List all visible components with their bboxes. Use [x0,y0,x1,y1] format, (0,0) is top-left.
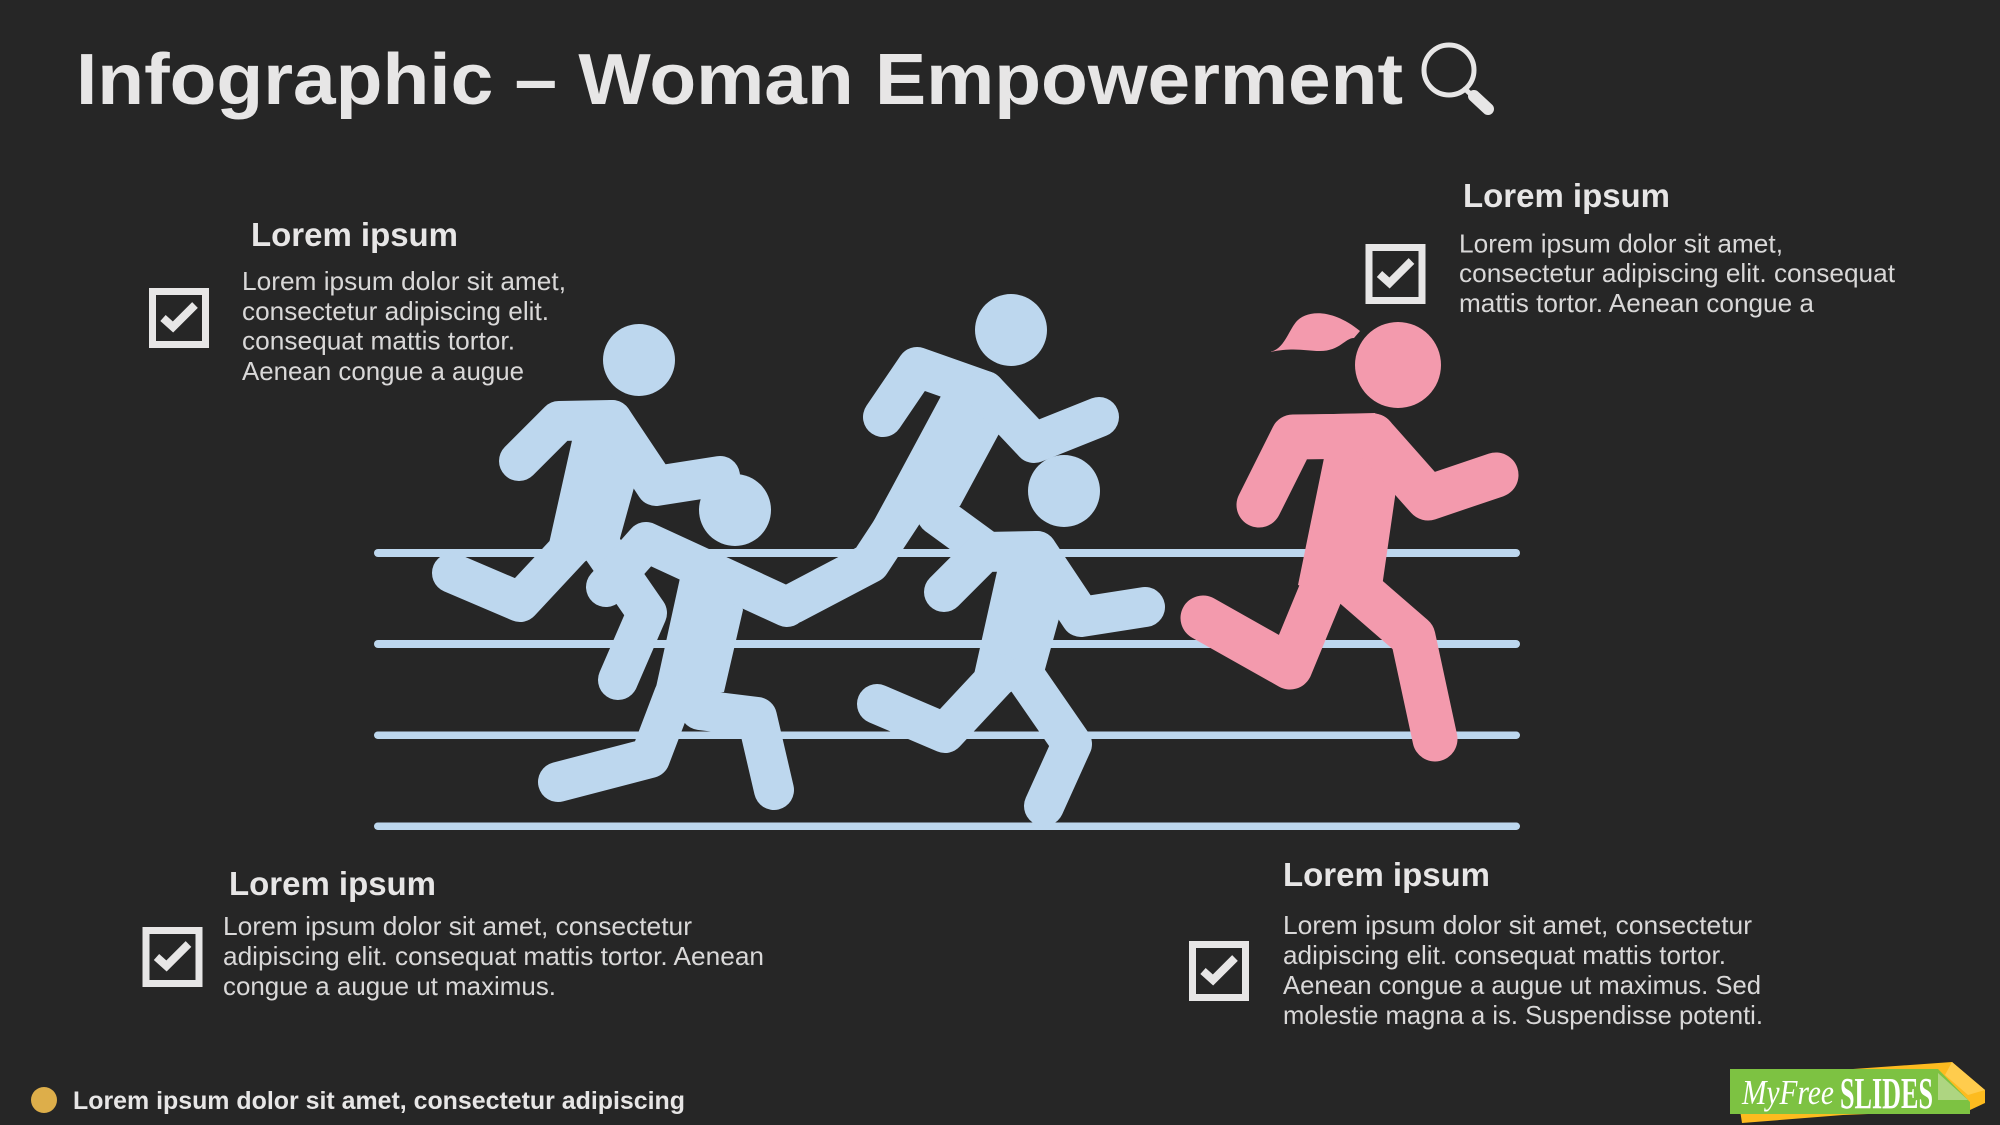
icon: checkbox top-right [1369,248,1422,300]
panel: bottom-left note [146,865,764,1001]
panel: top-right note [1369,177,1896,318]
text block: bottom-right: adipiscing elit. consequat mattis tortor. [1283,940,1726,970]
text block: top-left: Aenean congue a augue [242,356,524,386]
ponytail [1270,313,1360,352]
panel: bottom-right note [1192,856,1763,1030]
icon: checkbox bottom-left [146,930,199,984]
title: Infographic – Woman Empowerment [76,40,1403,120]
logo: MyFree Slides: SLIDES [1840,1069,1933,1118]
footer note: Lorem ipsum dolor sit amet, consectetur adipiscing [73,1087,685,1115]
text block: bottom-left [223,911,764,1001]
runner: blue bottom-right [877,455,1145,806]
text block: top-left [242,266,566,386]
heading: bottom-left: Lorem ipsum [229,865,436,902]
text block: bottom-right: Aenean congue a augue ut maximus. Sed [1283,970,1761,1000]
text block: top-left: consequat mattis tortor. [242,326,515,356]
running track lines [374,549,1520,830]
panel: top-left note [152,216,566,386]
heading: top-right: Lorem ipsum [1463,177,1670,214]
runner: blue top-centre [792,294,1099,604]
icon: magnifying glass [1424,45,1488,109]
head [1355,322,1441,408]
text block: bottom-left: congue a augue ut maximus. [223,971,556,1001]
body [1293,413,1400,600]
text block: bottom-left: adipiscing elit. consequat mattis tortor. Aenean [223,941,764,971]
runner: pink woman leading [1203,313,1496,739]
text block: top-right [1459,228,1896,318]
text block: bottom-left: Lorem ipsum dolor sit amet, consectetur [223,911,692,941]
text block: top-left: consectetur adipiscing elit. [242,296,549,326]
icon: checkbox top-left [152,292,206,344]
text block: top-right: mattis tortor. Aenean congue a [1459,288,1815,318]
heading: top-left: Lorem ipsum [251,216,458,253]
text block: top-right: consectetur adipiscing elit. consequat [1459,258,1896,288]
text block: bottom-right [1283,910,1763,1030]
text block: top-right: Lorem ipsum dolor sit amet, [1459,228,1783,258]
limbs [1203,436,1496,739]
icon: checkbox bottom-right [1192,944,1246,998]
runner: blue bottom-left [558,474,787,790]
logo: MyFree Slides [1730,1062,1985,1123]
runner: blue top-left [452,324,720,680]
footer marker dot [31,1087,57,1113]
heading: bottom-right: Lorem ipsum [1283,856,1490,893]
logo: MyFree Slides: MyFree [1741,1073,1834,1112]
text block: bottom-right: molestie magna a is. Suspendisse potenti. [1283,1000,1763,1030]
text block: top-left: Lorem ipsum dolor sit amet, [242,266,566,296]
text block: bottom-right: Lorem ipsum dolor sit amet, consectetur [1283,910,1752,940]
